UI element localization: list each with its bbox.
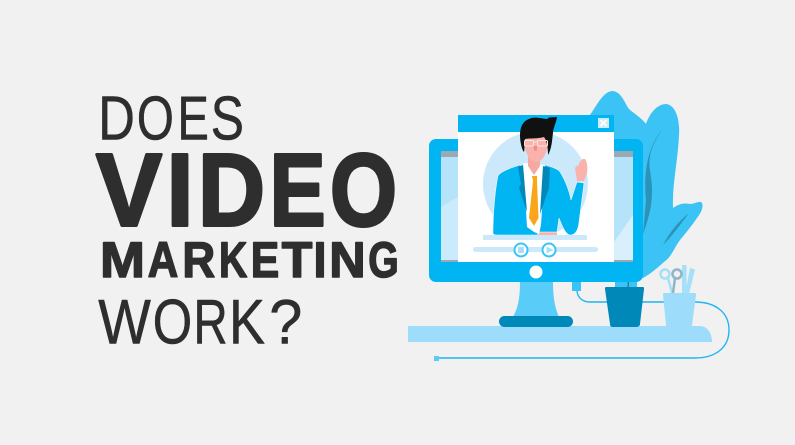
title line: video: I [166, 132, 194, 248]
title line: work: ? [269, 288, 302, 358]
title line: video: D [198, 132, 265, 248]
title line: does: S [211, 84, 244, 153]
cable end [434, 356, 439, 361]
video window [458, 115, 614, 262]
plug [572, 282, 581, 291]
raised hand [575, 159, 587, 181]
pen cup [663, 293, 696, 327]
title line: marketing: N [329, 232, 366, 288]
title line: video: E [270, 132, 326, 248]
title line: marketing: E [251, 232, 279, 288]
title line: does: E [178, 84, 209, 153]
monitor screen [441, 151, 633, 262]
title line: does: D [98, 84, 135, 153]
progress bar [473, 247, 598, 252]
title line: video: V [96, 132, 162, 248]
play button [542, 244, 556, 256]
desk [408, 326, 712, 342]
title line: marketing: G [368, 232, 399, 288]
close button [598, 118, 609, 128]
caption bar [483, 235, 587, 240]
title line: marketing: R [182, 232, 215, 288]
monitor base [499, 316, 573, 327]
plant leaves [590, 91, 703, 288]
power button [530, 266, 542, 278]
title line: work: W [98, 288, 151, 358]
title line: work: O [153, 288, 192, 358]
backdrop circle [483, 132, 588, 236]
title [96, 84, 399, 358]
title line: marketing: T [282, 232, 312, 288]
flower pot [605, 287, 644, 327]
title line: work: K [229, 288, 265, 358]
title line: video: O [330, 132, 397, 248]
title line: marketing: M [100, 232, 145, 288]
stop button [514, 244, 528, 256]
monitor body [429, 139, 643, 282]
title line: marketing: I [314, 232, 326, 288]
title line: marketing: K [219, 232, 247, 288]
tie [529, 176, 538, 226]
title line: work: R [194, 288, 228, 358]
monitor stand [513, 282, 559, 317]
stationery in cup [660, 265, 695, 294]
illustration: video on desktop [408, 91, 729, 361]
presenter [493, 117, 587, 235]
title line: marketing: A [148, 232, 178, 288]
title line: does: O [137, 84, 174, 153]
cable [438, 290, 729, 358]
